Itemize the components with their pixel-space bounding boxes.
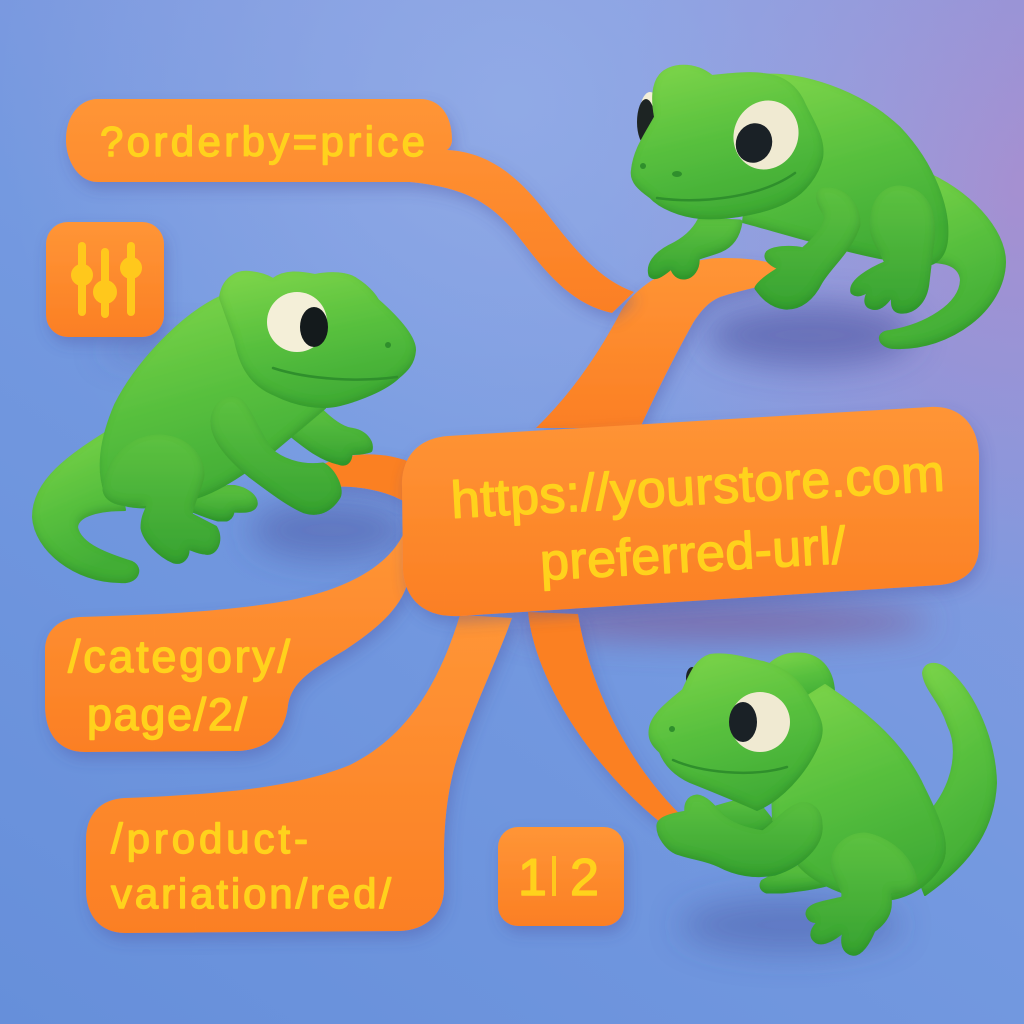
page text: page/2/ (87, 689, 247, 740)
far arm (710, 798, 772, 835)
nostril (669, 726, 675, 732)
eye (267, 292, 328, 352)
back leg (808, 835, 916, 953)
connector: bottom ribbon held by chameleon (528, 612, 686, 822)
main URL text: https://yourstore.com (449, 444, 946, 530)
eye (722, 90, 810, 180)
pill: orderby price with ribbon (66, 99, 634, 313)
front arm (213, 399, 339, 512)
nostrils (640, 163, 682, 177)
tail (900, 664, 996, 895)
far foot (193, 487, 255, 520)
far arm (650, 220, 740, 277)
icon: sliders (46, 222, 164, 337)
head (220, 272, 415, 407)
pagination number two: 2 (570, 849, 599, 907)
tail (33, 430, 138, 582)
tail (880, 170, 1005, 348)
pill text: ?orderby=price (100, 118, 425, 165)
label: product variation with ribbon (86, 615, 512, 933)
body (743, 75, 947, 265)
mouth (273, 368, 397, 380)
chameleon: bottom right (649, 653, 996, 953)
product text: /product- (111, 815, 308, 862)
eye (729, 692, 790, 752)
chameleon: left (33, 272, 415, 582)
far eye (637, 92, 661, 145)
crest (763, 653, 834, 705)
connector: left ribbon held by chameleon (322, 454, 415, 502)
pagination number one: 1 (518, 849, 547, 907)
label: category page 2 with ribbon (45, 535, 408, 752)
far foot (762, 867, 833, 892)
far eye (686, 667, 698, 689)
variation text: variation/red/ (111, 870, 391, 917)
main URL card (402, 407, 979, 616)
head (632, 66, 823, 218)
main URL text line 2: preferred-url/ (538, 517, 848, 592)
mouth (673, 760, 787, 773)
back leg (105, 437, 218, 561)
back leg (853, 188, 933, 311)
category text: /category/ (68, 631, 290, 682)
head (649, 654, 822, 810)
nostril (385, 342, 391, 348)
front arm (659, 797, 820, 875)
connector: top ribbon held by chameleon (536, 258, 780, 428)
chameleon: top right (632, 66, 1005, 348)
body (101, 296, 325, 507)
pagination badge (498, 827, 624, 926)
front arm (757, 190, 858, 307)
body (770, 685, 945, 900)
far arm (292, 410, 370, 463)
mouth (657, 173, 795, 200)
